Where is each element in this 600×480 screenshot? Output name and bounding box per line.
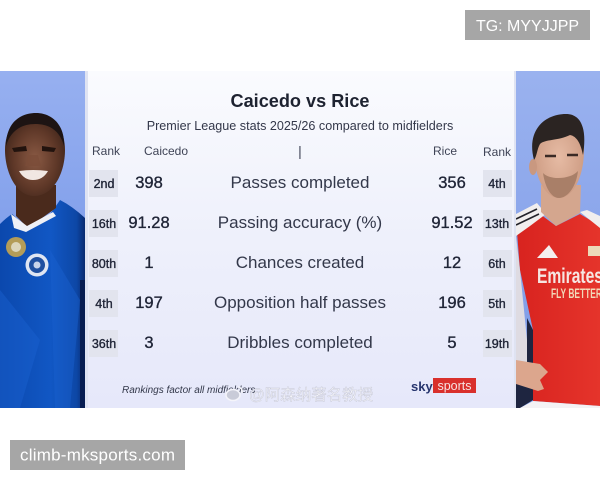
row: opposition half passes: 197 [135, 294, 163, 312]
player: Caicedo [0, 113, 85, 408]
row: passes completed: 2nd [94, 177, 114, 191]
column headers: Rank [92, 144, 121, 158]
label: site [10, 440, 185, 470]
row: passing accuracy: 91.52 [431, 214, 473, 232]
neck [541, 185, 581, 226]
row: dribbles completed: 5 [447, 334, 457, 352]
row: opposition half passes: 5th [488, 297, 506, 311]
beard [543, 171, 578, 198]
row: opposition half passes [95, 293, 506, 312]
column headers: | [298, 143, 302, 159]
row: chances created: 80th [92, 257, 116, 271]
row: passes completed [94, 173, 506, 192]
eyes [12, 146, 56, 152]
column headers [92, 143, 512, 159]
hair [532, 114, 584, 160]
row: opposition half passes: 4th [95, 297, 113, 311]
crest [588, 246, 600, 256]
label: TG: TG: MYYJJPP [476, 18, 579, 35]
row: dribbles completed: 19th [485, 337, 509, 351]
row: passing accuracy: 16th [92, 217, 116, 231]
row: passing accuracy: 91.28 [128, 214, 170, 232]
nose [25, 155, 41, 166]
shirt [0, 200, 85, 408]
panel: stats table [85, 71, 516, 408]
watermark: weibo: @阿森纳著名教授 [249, 386, 373, 404]
logo: sky sports: sky [411, 379, 433, 394]
row: chances created: 1 [144, 254, 154, 272]
row: chances created: 6th [488, 257, 506, 271]
shorts [520, 401, 600, 408]
white side strip [516, 236, 527, 362]
row: dribbles completed: 36th [92, 337, 116, 351]
head [5, 114, 65, 196]
row: passes completed: 398 [135, 174, 163, 192]
badge gold [6, 237, 26, 257]
ear [529, 159, 537, 175]
row: dribbles completed: Dribbles completed [227, 333, 373, 352]
Chelsea crest [26, 254, 48, 276]
row: opposition half passes: Opposition half passes [214, 293, 386, 312]
red shirt [517, 214, 600, 406]
neck [16, 185, 56, 228]
white collar and sleeve [516, 203, 546, 236]
row: opposition half passes: 196 [438, 294, 466, 312]
label: site: climb-mksports.com [20, 446, 175, 464]
row: passes completed: Passes completed [231, 173, 369, 192]
row: chances created: 12 [443, 254, 461, 272]
right photo background [516, 71, 600, 408]
row: chances created: Chances created [236, 253, 364, 272]
row: passing accuracy: 13th [485, 217, 509, 231]
footnote: Rankings factor all midfielders [122, 385, 255, 396]
hand [516, 360, 548, 391]
collar [11, 212, 56, 232]
row: chances created [92, 253, 506, 272]
rank boxes [89, 170, 512, 357]
smile [19, 170, 48, 180]
left photo background [0, 71, 85, 408]
row: passes completed: 4th [488, 177, 506, 191]
subtitle: Premier League stats 2025/26 compared to midfielders [147, 119, 453, 133]
column headers: Rice [433, 144, 457, 158]
head [534, 116, 584, 198]
logo: sky sports [411, 378, 476, 394]
row: passing accuracy [92, 213, 509, 232]
row: passing accuracy: Passing accuracy (%) [218, 213, 382, 232]
row: passes completed: 356 [438, 174, 466, 192]
eyes [545, 155, 578, 156]
row: dribbles completed [92, 333, 509, 352]
adidas mark [537, 245, 558, 258]
icon: weibo [226, 387, 242, 400]
hair [6, 113, 64, 146]
row: dribbles completed: 3 [144, 334, 154, 352]
player: Rice [516, 114, 600, 408]
label: TG [465, 10, 590, 40]
title: Caicedo vs Rice [230, 91, 370, 111]
logo: sky sports: sports [437, 379, 472, 393]
column headers: Rank [483, 145, 512, 159]
column headers: Caicedo [144, 144, 188, 158]
